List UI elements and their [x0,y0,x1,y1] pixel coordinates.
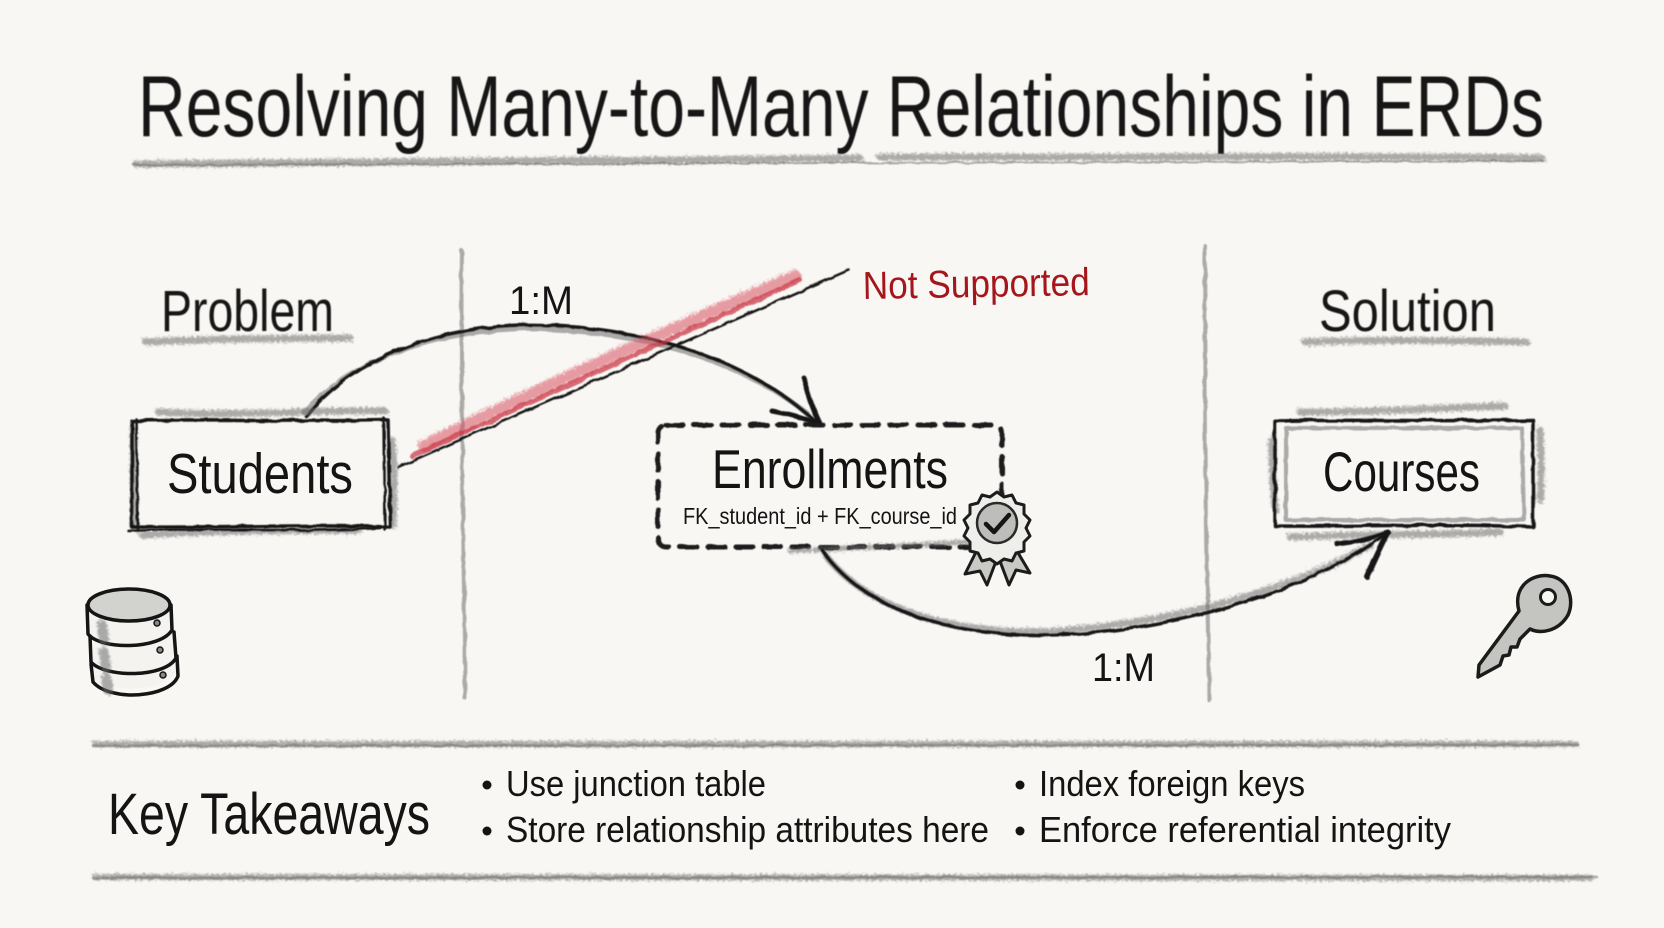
horizontal rule below takeaways [93,877,1597,878]
bullet: store relationship attributes: Store relationship attributes here [506,809,989,850]
text: foreign keys: FK_student_id + FK_course_id [683,503,957,529]
takeaways right column [1016,763,1451,850]
box: Students [128,411,394,535]
red strike-through: not supported [398,270,849,467]
box: Enrollments junction table [658,425,1002,551]
vertical dividers [461,246,1209,700]
horizontal rule above takeaways [93,744,1578,746]
heading: Problem: Problem [161,279,334,344]
label: Not Supported: Not Supported [862,261,1090,308]
label: 1:M top: 1:M [509,279,573,323]
bullet: use junction table: Use junction table [506,763,766,804]
icon: seal badge with check [964,492,1030,585]
title underline [134,157,1544,165]
arrow: Students to Enrollments 1:M [304,325,820,424]
heading: Solution: Solution [1319,279,1496,344]
box: Students: Students [167,442,353,506]
text: Enrollments: Enrollments [712,438,948,500]
icon: database stack [87,589,178,695]
takeaways left column [482,763,989,850]
heading: Key Takeaways: Key Takeaways [108,782,430,847]
box: Courses: Courses [1323,440,1480,503]
box: Courses [1272,406,1541,537]
bullet: enforce referential integrity: Enforce referential integrity [1039,809,1451,850]
label: 1:M bottom: 1:M [1092,646,1155,690]
arrow: Enrollments to Courses 1:M [822,532,1388,636]
bullet: index foreign keys: Index foreign keys [1039,763,1305,804]
icon: key [1478,576,1571,677]
